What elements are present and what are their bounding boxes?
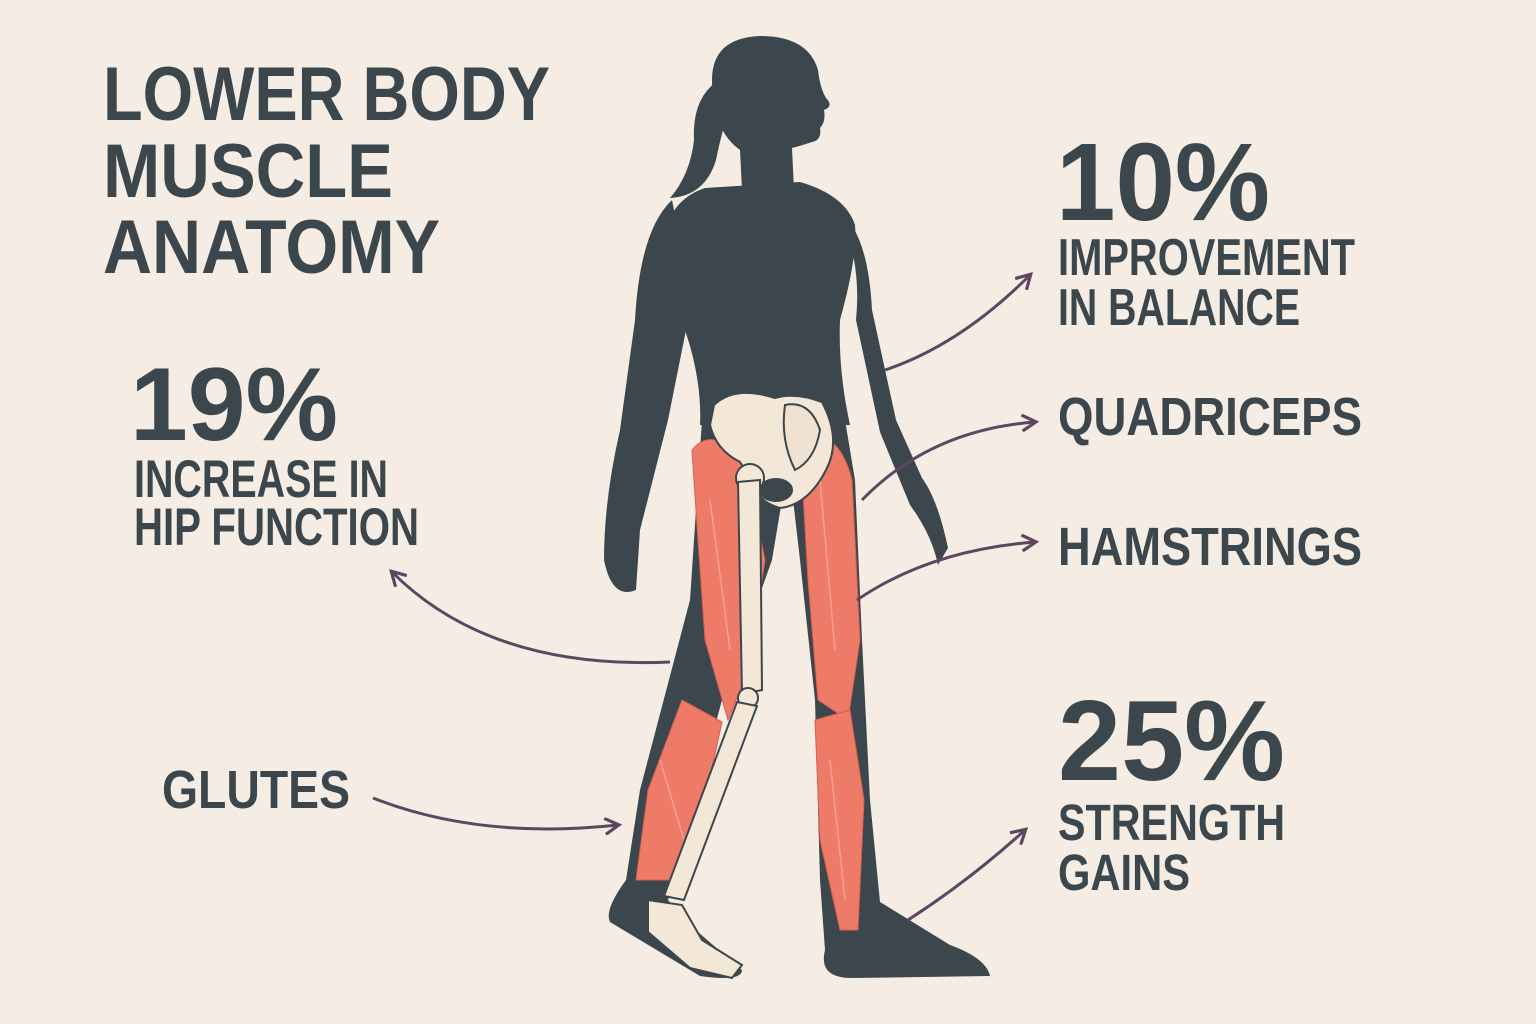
stat: 10% balance (1056, 121, 1355, 337)
stat: 25% strength: 25% (1058, 678, 1285, 805)
figure silhouette (604, 36, 990, 978)
title: ANATOMY (103, 205, 440, 290)
stat: 10% balance: IN BALANCE (1058, 279, 1300, 337)
stat: 19% hip function (130, 347, 419, 557)
stat: 19% hip function: 19% (130, 347, 338, 463)
arrows (373, 275, 1035, 920)
stat: 10% balance: IMPROVEMENT (1058, 229, 1355, 287)
stat: 19% hip function: HIP FUNCTION (134, 498, 419, 557)
title: LOWER BODY (103, 52, 550, 137)
stat: 25% strength: STRENGTH (1058, 794, 1285, 851)
stat: 25% strength (1058, 678, 1285, 901)
stat: 25% strength: GAINS (1058, 844, 1190, 901)
title (103, 52, 550, 290)
muscles (636, 437, 864, 930)
title: MUSCLE (103, 129, 393, 214)
label: hamstrings: HAMSTRINGS (1058, 517, 1362, 577)
label: quadriceps: QUADRICEPS (1058, 387, 1362, 447)
bones (648, 393, 833, 978)
stat: 10% balance: 10% (1056, 121, 1270, 244)
stat: 19% hip function: INCREASE IN (134, 450, 388, 509)
label: glutes: GLUTES (162, 760, 350, 820)
